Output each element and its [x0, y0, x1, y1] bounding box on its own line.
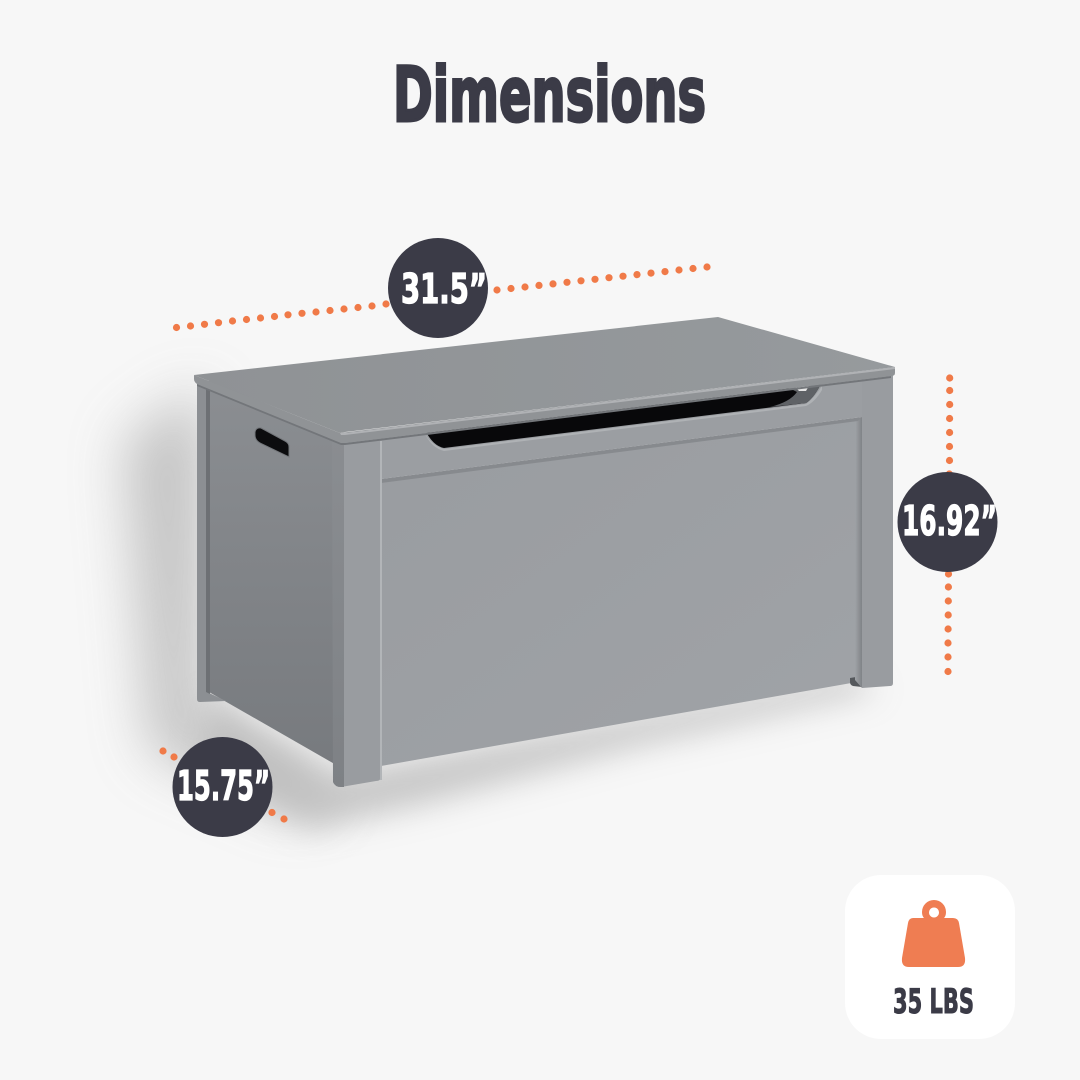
- dimension: depth 15.75 inches: 15.75”: [177, 762, 270, 810]
- dimension: depth 15.75 inches: [159, 737, 288, 837]
- dimension: width 31.5 inches: 31.5”: [401, 265, 487, 313]
- lid edge: [194, 367, 895, 443]
- lid front rail: [381, 372, 862, 479]
- front right post: [862, 370, 893, 688]
- dotted line: depth: [159, 747, 288, 823]
- side handle cut-out: [255, 428, 289, 457]
- lid opening slot: [425, 382, 822, 451]
- chest left side panel: [209, 380, 345, 770]
- icon: weight: [902, 900, 965, 967]
- badge: 15.75: [172, 737, 272, 837]
- dimension: height 16.92 inches: [898, 374, 998, 675]
- dimension: width 31.5 inches: [173, 238, 711, 338]
- storage chest: [194, 317, 895, 787]
- lid top surface: [194, 317, 895, 433]
- badge: 31.5: [388, 238, 488, 338]
- right foot: [850, 676, 862, 687]
- dimension: height 16.92 inches: 16.92”: [902, 497, 997, 545]
- dotted line: width: [173, 263, 711, 331]
- title: Dimensions: [393, 50, 706, 139]
- weight card: [845, 875, 1015, 1039]
- chest rear left post: [197, 380, 226, 702]
- badge: 16.92: [898, 472, 998, 572]
- front left post: [333, 432, 381, 787]
- weight label: 35 LBS: [893, 982, 974, 1022]
- shadows behind the chest: [125, 385, 880, 830]
- dotted line: height: [944, 374, 953, 675]
- front panel: [381, 418, 860, 766]
- lid underside shadow line: [197, 376, 891, 445]
